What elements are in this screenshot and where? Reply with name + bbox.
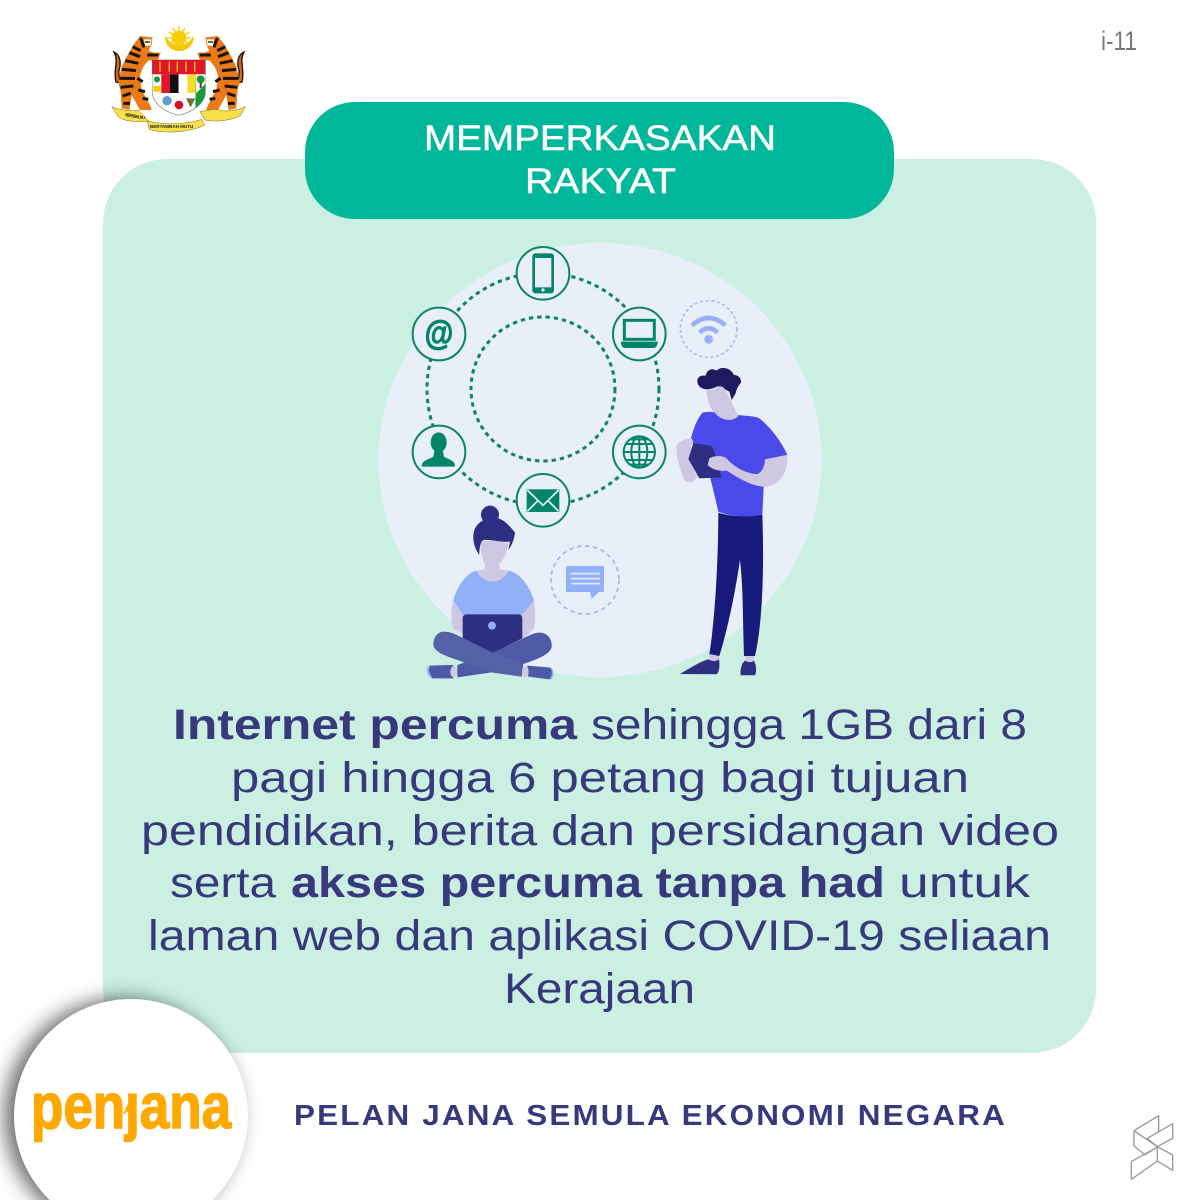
icon: person — [413, 426, 465, 478]
motto ribbon: BERSEKUTU — [125, 112, 145, 120]
seated woman with laptop — [427, 506, 554, 679]
icon: chat bubble — [551, 546, 619, 614]
penjana logo badge — [5, 999, 248, 1200]
network diagram — [413, 247, 737, 527]
icon: Malaysian coat of arms — [112, 26, 246, 132]
icon: publisher logo — [1131, 1116, 1173, 1179]
icon: envelope — [517, 474, 569, 527]
body text: laman web dan aplikasi COVID-19 seliaan — [148, 912, 1051, 960]
title pill: RAKYAT — [525, 162, 676, 201]
icon: at sign: @ — [425, 315, 453, 353]
body text: Kerajaan — [504, 965, 695, 1013]
body text — [141, 701, 1059, 1013]
standing man — [676, 368, 787, 675]
body text: Internet percuma — [173, 701, 578, 749]
penjana logo badge: penjana — [31, 1070, 231, 1142]
page number: i-11 — [1101, 26, 1137, 56]
panel: main green card — [103, 159, 1096, 1053]
icon: phone — [517, 247, 569, 300]
icon: at sign — [413, 308, 465, 360]
motto ribbon — [112, 107, 246, 132]
body text: pagi hingga 6 petang bagi tujuan — [231, 754, 969, 802]
body text: serta — [170, 859, 276, 907]
left tiger — [114, 36, 161, 110]
title pill: MEMPERKASAKAN — [424, 119, 776, 158]
icon: globe — [613, 426, 666, 478]
icon: laptop — [613, 308, 666, 360]
title pill — [305, 102, 894, 219]
icon: wifi — [680, 301, 737, 357]
large background circle — [378, 243, 822, 677]
body text: pendidikan, berita dan persidangan video — [141, 807, 1059, 855]
motto ribbon: BERTAMBAH MUTU — [150, 124, 193, 129]
crescent and sun — [165, 26, 193, 51]
body text: akses percuma tanpa had — [291, 859, 885, 907]
footer tagline: PELAN JANA SEMULA EKONOMI NEGARA — [294, 1100, 1007, 1132]
body text: sehingga 1GB dari 8 — [591, 701, 1027, 749]
body text: untuk — [899, 859, 1031, 907]
shield — [152, 60, 205, 115]
